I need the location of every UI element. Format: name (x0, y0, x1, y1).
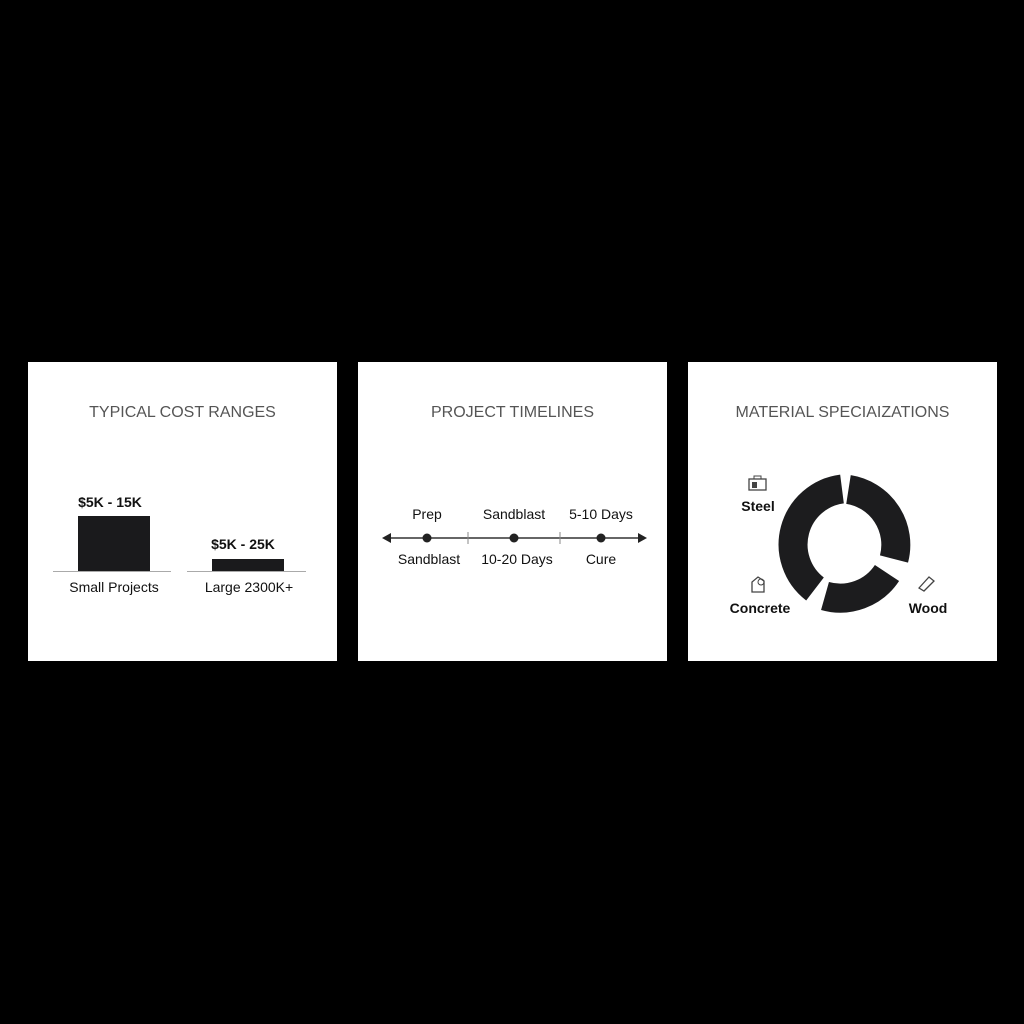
icon: steel (748, 476, 767, 491)
donut chart (778, 474, 910, 613)
bar: small projects (78, 516, 150, 571)
label: wood: Wood (909, 600, 947, 616)
label: small value: $5K - 15K (78, 494, 142, 510)
labels: bottom: Sandblast (398, 551, 460, 567)
label: concrete: Concrete (730, 600, 790, 616)
panel: materials (688, 362, 997, 661)
heading: materials: MATERIAL SPECIAIZATIONS (736, 404, 949, 421)
panel: timelines: Cure (586, 551, 616, 567)
label: large value: $5K - 25K (211, 536, 275, 552)
panel: timelines: Sandblast (483, 506, 545, 522)
heading: cost: TYPICAL COST RANGES (89, 404, 276, 421)
label: small projects: Small Projects (69, 579, 159, 595)
icon: concrete (751, 576, 765, 593)
icon: wood (918, 576, 935, 592)
label: steel: Steel (741, 498, 775, 514)
panel: timelines (358, 362, 667, 661)
label: large projects: Large 2300K+ (205, 579, 293, 595)
panel: cost ranges (28, 362, 337, 661)
timeline chart (382, 532, 647, 544)
baselines (53, 571, 171, 572)
labels: top: Prep (412, 506, 442, 522)
panel: timelines: 10-20 Days (481, 551, 553, 567)
heading: timelines: PROJECT TIMELINES (431, 404, 594, 421)
bar: large projects (212, 559, 284, 571)
panel: timelines: 5-10 Days (569, 506, 633, 522)
